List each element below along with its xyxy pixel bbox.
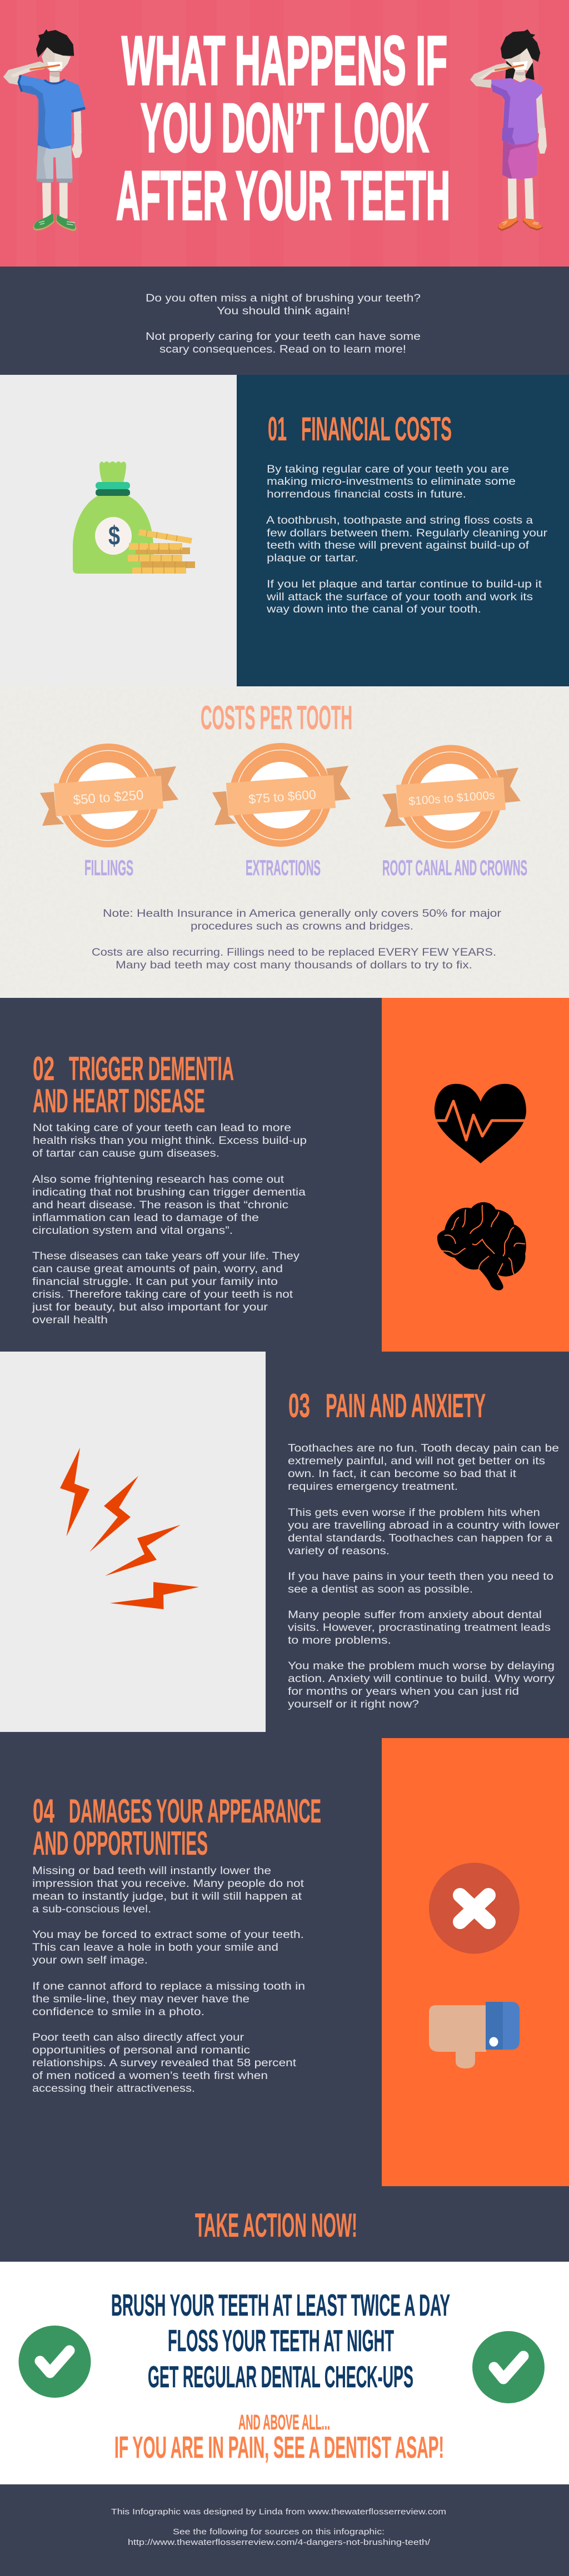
text block: pain body: Many people suffer from anxiety about dental bbox=[288, 1609, 542, 1621]
heading: 01 financial costs bbox=[268, 410, 452, 448]
text block: pain body: dental standards. Toothaches can happen for a bbox=[288, 1533, 553, 1544]
illustration: boy brushing teeth bbox=[3, 29, 85, 231]
text block: credits and sources: http://www.thewaterflosserreview.com/4-dangers-not-brushing-teeth/ bbox=[128, 2538, 431, 2547]
text block: dementia body: health risks than you might think. Excess build-up bbox=[33, 1135, 307, 1147]
panel: costs per tooth: COSTS PER TOOTH bbox=[201, 699, 352, 736]
text block: dementia body: circulation system and vital organs”. bbox=[32, 1225, 233, 1237]
text block: pain body: requires emergency treatment. bbox=[288, 1481, 458, 1493]
text block: financial costs body: teeth with these will prevent against build-up of bbox=[267, 540, 530, 551]
icon: left check circle bbox=[19, 2326, 91, 2398]
text block: pain body: you are travelling abroad in a country with lower bbox=[288, 1520, 560, 1531]
heading: 04 damages your appearance and opportunities: AND OPPORTUNITIES bbox=[33, 1825, 208, 1862]
badge: root canal and crowns cost bbox=[382, 745, 521, 848]
heading: 03 pain and anxiety bbox=[288, 1387, 486, 1424]
text block: pain body: to more problems. bbox=[288, 1635, 391, 1646]
text block: introduction: Not properly caring for your teeth can have some bbox=[146, 331, 421, 343]
icon: thumbs down bbox=[429, 2002, 520, 2068]
panel: costs per tooth: EXTRACTIONS bbox=[246, 856, 321, 880]
text block: pain body: variety of reasons. bbox=[288, 1545, 390, 1557]
text block: financial costs body: will attack the surface of your tooth and work its bbox=[266, 591, 533, 603]
text block: appearance body: This can leave a hole in both your smile and bbox=[32, 1942, 278, 1954]
text block: introduction: You should think again! bbox=[217, 305, 350, 317]
panel: header banner bbox=[0, 0, 569, 267]
text block: dementia body: Also some frightening research has come out bbox=[32, 1174, 284, 1186]
text block: appearance body: confidence to smile in a photo. bbox=[32, 2006, 204, 2018]
text block: appearance body: a sub-conscious level. bbox=[32, 1904, 151, 1915]
badge: fillings cost: $50 to $250 bbox=[73, 787, 144, 808]
text block: dementia body: of tartar can cause gum diseases. bbox=[32, 1148, 219, 1159]
text block: appearance body: your own self image. bbox=[32, 1955, 148, 1966]
text block: and above all: AND ABOVE ALL... bbox=[238, 2411, 330, 2434]
text block: appearance body: You may be forced to extract some of your teeth. bbox=[32, 1929, 304, 1941]
text block: dementia body: indicating that not brushing can trigger dementia bbox=[32, 1187, 306, 1198]
text block: appearance body: mean to instantly judge, but it will still happen at bbox=[32, 1891, 302, 1902]
text block: credits and sources: This Infographic was designed by Linda from www.thewaterflosserreview.com bbox=[111, 2507, 446, 2517]
heading: 01 financial costs: 01 bbox=[268, 410, 287, 448]
text block: appearance body: impression that you receive. Many people do not bbox=[32, 1878, 305, 1890]
text block: introduction bbox=[146, 293, 421, 355]
text block: dementia body: and heart disease. The reason is that “chronic bbox=[32, 1199, 288, 1211]
text block: appearance body: of men noticed a women’s teeth first when bbox=[32, 2070, 268, 2082]
panel: 03 pain and anxiety bbox=[0, 1352, 560, 1732]
text block: insurance note: Costs are also recurring. Fillings need to be replaced EVERY FEW YEARS. bbox=[92, 947, 496, 958]
text block: pain body: action. Anxiety will continue to build. Why worry bbox=[288, 1673, 555, 1685]
text block: financial costs body: horrendous financial costs in future. bbox=[267, 489, 466, 500]
heading: 04 damages your appearance and opportunities: 04 bbox=[33, 1792, 54, 1830]
text block: dementia body bbox=[32, 1122, 307, 1326]
illustration: girl brushing teeth bbox=[470, 29, 547, 231]
text block: pain body: own. In fact, it can become so bad that it bbox=[288, 1468, 517, 1480]
text block: insurance note: procedures such as crowns and bridges. bbox=[191, 921, 413, 932]
text: TAKE ACTION NOW! bbox=[195, 2207, 357, 2244]
text block: financial costs body: plaque or tartar. bbox=[267, 553, 358, 564]
icon: money bag with coins bbox=[73, 461, 195, 574]
icon: money bag with coins: $ bbox=[108, 521, 120, 551]
text block: appearance body: opportunities of personal and romantic bbox=[32, 2045, 250, 2056]
text block: financial costs body: few dollars between them. Regularly cleaning your bbox=[267, 528, 548, 539]
text block: pain body bbox=[288, 1443, 560, 1710]
text block: pain body: see a dentist as soon as possible. bbox=[288, 1584, 473, 1595]
text block: appearance body: Poor teeth can also directly affect your bbox=[32, 2032, 244, 2043]
badge: root canal and crowns cost: $100s to $1000s bbox=[408, 789, 495, 808]
text block: insurance note: Note: Health Insurance in America generally only covers 50% for major bbox=[103, 908, 502, 920]
text block: pain body: for months or years when you can just rid bbox=[288, 1686, 519, 1698]
text block: insurance note bbox=[92, 908, 502, 971]
text block: dementia body: financial struggle. It can put your family into bbox=[32, 1276, 278, 1288]
badge: extractions cost bbox=[212, 743, 351, 847]
text block: pain body: This gets even worse if the problem hits when bbox=[288, 1507, 540, 1519]
text block: introduction: scary consequences. Read on to learn more! bbox=[159, 344, 406, 355]
text block: pain body: yourself or it right now? bbox=[288, 1699, 419, 1710]
text block: pain body: If you have pains in your teeth then you need to bbox=[288, 1571, 553, 1583]
text block: appearance body: accessing their attractiveness. bbox=[32, 2083, 195, 2095]
heading: 02 trigger dementia and heart disease bbox=[33, 1050, 234, 1119]
text block: appearance body bbox=[32, 1865, 305, 2095]
icon: heart with pulse bbox=[435, 1084, 526, 1163]
badge: fillings cost bbox=[40, 744, 178, 847]
text block: dementia body: can cause great amounts of pain, worry, and bbox=[32, 1263, 283, 1275]
text block: dementia body: Not taking care of your teeth can lead to more bbox=[33, 1122, 291, 1134]
title bbox=[116, 23, 450, 234]
icon: right check circle bbox=[472, 2331, 545, 2403]
text block: appearance body: relationships. A survey revealed that 58 percent bbox=[32, 2057, 297, 2069]
text block: insurance note: Many bad teeth may cost many thousands of dollars to try to fix. bbox=[116, 960, 472, 971]
heading: 03 pain and anxiety: 03 bbox=[288, 1387, 310, 1424]
text block: financial costs body: By taking regular care of your teeth you are bbox=[267, 464, 509, 475]
heading: 02 trigger dementia and heart disease: 02 bbox=[33, 1050, 54, 1087]
text block: appearance body: Missing or bad teeth will instantly lower the bbox=[32, 1865, 271, 1877]
panel: 02 dementia and heart disease: TRIGGER DEMENTIA bbox=[69, 1050, 234, 1087]
text block: and above all bbox=[114, 2411, 444, 2464]
panel: 04 damages appearance and opportunities bbox=[32, 1738, 569, 2186]
text block: financial costs body: If you let plaque and tartar continue to build-up it bbox=[267, 579, 542, 590]
heading: 02 trigger dementia and heart disease: AND HEART DISEASE bbox=[33, 1082, 205, 1119]
text block: dementia body: just for beauty, but also important for your bbox=[32, 1302, 268, 1313]
text block: introduction: Do you often miss a night of brushing your teeth? bbox=[146, 293, 421, 304]
text block: financial costs body: way down into the canal of your tooth. bbox=[266, 604, 481, 615]
text block: pain body: visits. However, procrastinating treatment leads bbox=[288, 1622, 551, 1634]
text block: appearance body: the smile-line, they may never have the bbox=[32, 1993, 249, 2005]
icon: red cross circle bbox=[429, 1862, 520, 1954]
panel: 02 dementia and heart disease bbox=[0, 998, 569, 1352]
icon: pain lightning bolts bbox=[60, 1448, 199, 1609]
text block: appearance body: If one cannot afford to replace a missing tooth in bbox=[32, 1981, 305, 1992]
text block: pain body: You make the problem much worse by delaying bbox=[288, 1660, 555, 1672]
text block: dementia body: crisis. Therefore taking care of your teeth is not bbox=[32, 1289, 293, 1300]
icon: brain bbox=[437, 1202, 526, 1290]
heading: 04 damages your appearance and opportunities bbox=[33, 1792, 321, 1862]
panel: 01 financial costs bbox=[0, 375, 569, 686]
text block: financial costs body bbox=[266, 464, 548, 615]
text block: dementia body: These diseases can take years off your life. They bbox=[32, 1251, 300, 1262]
text block: pain body: extremely painful, and will not get better on its bbox=[288, 1455, 545, 1467]
text block: recommended actions bbox=[111, 2288, 450, 2394]
text block: credits and sources: See the following for sources on this infographic: bbox=[173, 2527, 385, 2537]
text block: dementia body: overall health bbox=[32, 1314, 108, 1326]
text block: dementia body: inflammation can lead to damage of the bbox=[32, 1212, 259, 1224]
text block: credits and sources bbox=[111, 2507, 446, 2547]
text block: financial costs body: A toothbrush, toothpaste and string floss costs a bbox=[266, 515, 533, 526]
panel: costs per tooth: FILLINGS bbox=[84, 856, 133, 880]
panel: action list bbox=[0, 2262, 569, 2484]
panel: costs per tooth bbox=[0, 686, 569, 998]
text block: pain body: Toothaches are no fun. Tooth decay pain can be bbox=[288, 1443, 559, 1454]
badge: extractions cost: $75 to $600 bbox=[248, 787, 317, 806]
text block: financial costs body: making micro-investments to eliminate some bbox=[267, 476, 516, 488]
